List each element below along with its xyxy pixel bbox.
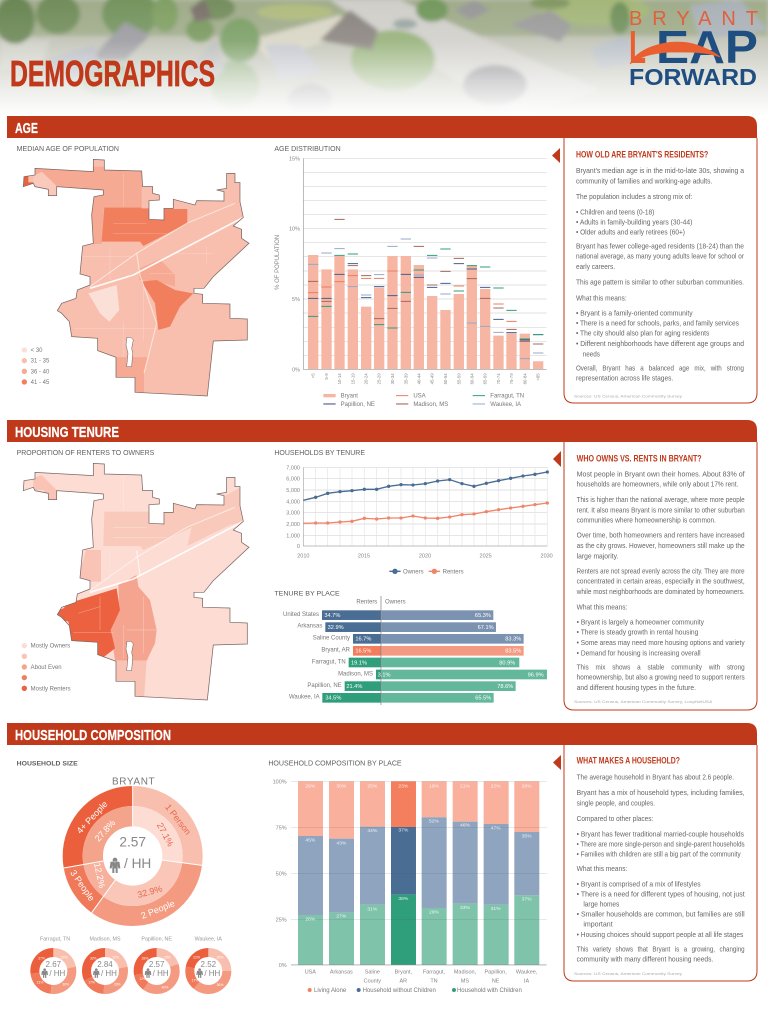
chart: age distribution: 80-84 — [522, 373, 527, 384]
chart: households by tenure: 3,000 — [286, 511, 300, 517]
panel: who owns vs. rents: and different housing types in the future. — [577, 683, 696, 692]
panel: median age map — [17, 146, 257, 400]
chart: household size donuts: 12.2% — [92, 862, 107, 889]
panel: what makes a household: single people, and couples. — [577, 798, 655, 807]
chart: household composition by place: 25% — [276, 917, 287, 923]
panel: median age map: 36 - 40 — [31, 369, 50, 375]
panel: who owns vs. rents: Over time, both homeowners and renters have increased — [577, 531, 745, 540]
chart: household size donuts: 22% — [61, 956, 67, 960]
panel: what makes a household: Bryant has a mix of household types, including families, — [577, 788, 745, 797]
chart: household composition by place: 38% — [398, 896, 409, 902]
panel: median age map: < 30 — [31, 348, 43, 354]
logo: Bryant Leap Forward: BRYANT — [629, 8, 758, 30]
panel: what makes a household: • Bryant has fewer traditional married-couple households — [577, 829, 744, 838]
panel: how old are Bryant's residents: • The city should also plan for aging residents — [576, 329, 710, 338]
chart: household composition by place: Waukee, — [516, 970, 538, 976]
panel: what makes a household: The average household in Bryant has about 2.6 people. — [577, 773, 734, 782]
panel: who owns vs. rents: communities where homeownership is common. — [577, 515, 716, 524]
chart: households by tenure: 2010 — [297, 553, 309, 559]
chart: households by tenure: Renters — [443, 569, 464, 575]
chart: age distribution: 30-34 — [390, 373, 395, 384]
chart: household size donuts — [17, 761, 227, 990]
chart: household composition by place: IA — [524, 978, 530, 984]
panel: what makes a household: • Smaller households are common, but families are still — [577, 910, 745, 919]
panel: who owns vs. rents — [553, 442, 757, 710]
chart: age distribution: 5-9 — [324, 373, 329, 380]
chart: tenure by place: 34.5% — [325, 696, 341, 702]
chart: household composition by place: 26% — [305, 917, 316, 923]
chart: tenure by place: 16.7% — [355, 637, 371, 643]
chart: households by tenure: 4,000 — [286, 499, 300, 505]
chart: household size donuts: HOUSEHOLD SIZE — [17, 761, 78, 768]
chart: households by tenure — [274, 450, 553, 575]
chart: household size donuts: 12% — [139, 977, 146, 981]
chart: tenure by place: 67.1% — [478, 625, 494, 631]
panel: who owns vs. rents: What this means: — [577, 603, 627, 612]
chart: household composition by place: 21% — [460, 783, 471, 789]
chart: age distribution: >85 — [536, 373, 541, 381]
panel: renters to owners map — [17, 450, 257, 704]
chart: tenure by place: 83.5% — [505, 649, 521, 655]
panel: how old are Bryant's residents: • Adults in family-building years (30-44) — [576, 217, 693, 226]
panel: how old are Bryant's residents: HOW OLD ARE BRYANT'S RESIDENTS? — [576, 149, 708, 159]
chart: age distribution: 40-44 — [416, 373, 421, 384]
chart: tenure by place: Waukee, IA — [289, 695, 320, 701]
chart: household composition by place: 43% — [336, 840, 347, 846]
chart: household composition by place: Madison, — [454, 970, 477, 976]
chart: age distribution: % OF POPULATION — [275, 235, 281, 290]
logo: Bryant Leap Forward: EAP — [656, 21, 758, 73]
chart: age distribution: 25-29 — [377, 373, 382, 384]
chart: household size donuts: 27.1% — [155, 821, 176, 848]
chart: age distribution: <5 — [311, 373, 316, 378]
section header: age: AGE — [15, 120, 38, 137]
chart: household size donuts: Madison, MS — [89, 936, 121, 942]
chart: households by tenure: 2020 — [419, 553, 431, 559]
chart: household composition by place: Household with Children — [457, 988, 522, 994]
chart: household composition by place: County — [364, 978, 381, 984]
chart: tenure by place: 3.1% — [378, 672, 391, 678]
chart: households by tenure: HOUSEHOLDS BY TENURE — [274, 450, 365, 457]
chart: household size donuts: 4+ People — [75, 799, 110, 836]
chart: tenure by place: 80.9% — [499, 660, 515, 666]
chart: households by tenure: 5,000 — [286, 488, 300, 494]
chart: tenure by place: 83.3% — [505, 637, 521, 643]
chart: household size donuts: 2.52 — [201, 960, 217, 969]
chart: household composition by place: 27% — [336, 914, 347, 920]
chart: household composition by place: 0% — [279, 963, 287, 969]
logo: Bryant Leap Forward — [629, 8, 758, 90]
panel: renters to owners map: Mostly Renters — [31, 686, 71, 692]
panel: how old are Bryant's residents: The population includes a strong mix of: — [576, 192, 692, 201]
chart: household size donuts: 27.8% — [93, 818, 117, 843]
chart: household size donuts: / HH — [101, 969, 117, 978]
panel: how old are Bryant's residents: • Different neighborhoods have different age groups and — [576, 339, 744, 348]
panel: who owns vs. rents: as the city grows. However, homeowners still make up the — [577, 541, 745, 550]
chart: tenure by place: Papillion, NE — [307, 683, 342, 689]
chart: household composition by place: AR — [400, 978, 407, 984]
chart: tenure by place: 19.1% — [351, 660, 367, 666]
panel: how old are Bryant's residents: Bryant's median age is in the mid-to-late 30s, showing a — [576, 166, 745, 175]
chart: age distribution: 65-69 — [483, 373, 488, 384]
chart: age distribution: 20-24 — [364, 373, 369, 384]
chart: tenure by place: Saline County — [313, 636, 350, 642]
panel: who owns vs. rents: WHO OWNS VS. RENTS IN BRYANT? — [577, 453, 702, 463]
panel: median age map: 41 - 45 — [31, 380, 50, 386]
panel: how old are Bryant's residents: community of families and working-age adults. — [576, 176, 712, 185]
panel: how old are Bryant's residents: This age pattern is similar to other suburban communities. — [576, 277, 744, 286]
panel: median age map: MEDIAN AGE OF POPULATION — [17, 146, 119, 153]
chart: household composition by place: 37% — [398, 828, 409, 834]
panel: who owns vs. rents: homeownership, but also a growing need to support renters — [577, 673, 745, 682]
chart: age distribution: 0% — [292, 368, 300, 374]
chart: tenure by place: 16.5% — [355, 649, 371, 655]
chart: household composition by place: TN — [430, 978, 438, 984]
chart: household composition by place: Papillion, — [485, 970, 507, 976]
chart: age distribution: Farragut, TN — [490, 394, 524, 400]
panel: how old are Bryant's residents: • There is a need for schools, parks, and family services — [576, 319, 739, 328]
chart: age distribution: 60-64 — [469, 373, 474, 384]
chart: household composition by place: 29% — [305, 783, 316, 789]
chart: household size donuts: 25% — [217, 956, 223, 960]
chart: age distribution: 15-19 — [350, 373, 355, 384]
chart: tenure by place: 65.5% — [475, 696, 491, 702]
panel: what makes a household: • Housing choices should support people at all life stages — [577, 930, 744, 939]
chart: age distribution: AGE DISTRIBUTION — [274, 146, 341, 153]
chart: household composition by place: 35% — [522, 833, 532, 839]
chart: households by tenure: 2030 — [541, 553, 553, 559]
panel: who owns vs. rents: rent. It also means Bryant is more similar to other suburban — [577, 505, 745, 514]
logo: Bryant Leap Forward: FORWARD — [629, 64, 757, 90]
title: DEMOGRAPHICS — [10, 53, 215, 94]
chart: age distribution: 45-49 — [430, 373, 435, 384]
chart: household size donuts: 32.9% — [136, 884, 163, 900]
chart: household composition by place: 75% — [276, 825, 287, 831]
panel: who owns vs. rents: Most people in Bryant own their homes. About 83% of — [577, 470, 746, 479]
section header: housing tenure: HOUSING TENURE — [15, 424, 119, 441]
chart: household size donuts: 17% — [192, 979, 198, 983]
chart: age distribution: Papillion, NE — [341, 402, 375, 408]
chart: household composition by place: NE — [492, 978, 500, 984]
chart: household size donuts: / HH — [124, 856, 151, 871]
chart: tenure by place: Owners — [385, 599, 406, 605]
panel: how old are Bryant's residents: Sources: US Census, American Community Survey — [574, 394, 682, 398]
chart: household composition by place: 100% — [273, 779, 287, 785]
panel: renters to owners map: About Even — [31, 665, 62, 671]
panel: how old are Bryant's residents: national average, as many young adults leave for school or — [576, 252, 744, 261]
chart: household size donuts: 1 Person — [163, 802, 193, 837]
panel: how old are Bryant's residents: early careers. — [576, 262, 615, 271]
chart: tenure by place: Farragut, TN — [312, 659, 346, 665]
chart: household size donuts: Waukee, IA — [195, 936, 222, 942]
panel: what makes a household: • Bryant is comprised of a mix of lifestyles — [577, 879, 701, 888]
panel: who owns vs. rents: • Bryant is largely a homeowner community — [577, 618, 704, 627]
chart: household composition by place: 31% — [491, 906, 501, 912]
panel: what makes a household: large homes — [583, 900, 620, 909]
chart: household composition by place: HOUSEHOLD COMPOSITION BY PLACE — [268, 761, 402, 768]
chart: households by tenure: Owners — [403, 569, 424, 575]
chart: tenure by place: 34.7% — [324, 613, 340, 619]
chart: household size donuts: 2.67 — [46, 960, 62, 969]
panel: what makes a household: What this means: — [577, 864, 627, 873]
chart: tenure by place — [274, 591, 547, 705]
chart: household size donuts: 40% — [162, 986, 168, 990]
chart: household size donuts: 22% — [193, 956, 200, 960]
chart: household composition by place: Living Alone — [314, 988, 347, 994]
chart: households by tenure: 2025 — [480, 553, 492, 559]
chart: households by tenure: 2015 — [358, 553, 370, 559]
chart: household size donuts: 32% — [90, 956, 97, 960]
chart: tenure by place: United States — [283, 612, 319, 618]
chart: tenure by place: 65.3% — [475, 613, 491, 619]
panel: what makes a household: important — [583, 920, 614, 929]
panel: what makes a household: Compared to other places: — [577, 814, 653, 823]
chart: household composition by place: 23% — [398, 783, 409, 789]
chart: age distribution: USA — [413, 394, 426, 400]
panel: how old are Bryant's residents — [552, 138, 757, 403]
panel: who owns vs. rents: households are homeowners, while only about 17% rent. — [577, 480, 738, 489]
chart: household size donuts: 17% — [88, 980, 95, 984]
chart: age distribution: 10-14 — [337, 373, 342, 384]
chart: household size donuts: 30% — [62, 982, 69, 986]
chart: tenure by place: Madison, MS — [338, 671, 373, 677]
chart: household size donuts: / HH — [204, 969, 221, 978]
panel: renters to owners map: Mostly Owners — [31, 644, 70, 650]
chart: household size donuts: 2.57 — [149, 960, 165, 969]
panel: who owns vs. rents: concentrated in certain areas, especially in the southwest, — [577, 577, 745, 586]
chart: households by tenure: 0 — [297, 544, 300, 550]
chart: age distribution — [274, 146, 547, 408]
chart: household size donuts: Farragut, TN — [40, 936, 70, 942]
panel: how old are Bryant's residents: What this means: — [576, 293, 627, 302]
chart: household size donuts: 29% — [114, 982, 121, 986]
panel: how old are Bryant's residents: needs — [583, 349, 600, 358]
panel: what makes a household: community with many different housing needs. — [577, 955, 713, 964]
panel: who owns vs. rents: • Some areas may need more housing options and variety — [577, 638, 745, 647]
panel: what makes a household: • Families with children are still a big part of the community — [577, 849, 741, 858]
panel: how old are Bryant's residents: representation across life stages. — [576, 374, 673, 383]
chart: tenure by place: Renters — [356, 599, 377, 605]
chart: age distribution: 10% — [289, 227, 300, 233]
section header: housing tenure — [7, 420, 757, 442]
section header: age — [7, 116, 757, 138]
panel: how old are Bryant's residents: Bryant has fewer college-aged residents (18-24) than the — [576, 241, 744, 250]
chart: household composition by place: 52% — [429, 818, 440, 824]
chart: household composition by place: 31% — [367, 906, 378, 912]
logo: Bryant Leap Forward: L — [629, 21, 646, 73]
chart: tenure by place: TENURE BY PLACE — [274, 591, 340, 598]
section header: household composition: HOUSEHOLD COMPOSITION — [15, 727, 171, 744]
chart: household composition by place — [268, 761, 547, 994]
chart: age distribution: 55-59 — [456, 373, 461, 384]
chart: households by tenure: 2,000 — [286, 522, 300, 528]
panel: who owns vs. rents: • There is steady growth in rental housing — [577, 628, 698, 637]
chart: household size donuts: 22% — [112, 956, 119, 960]
chart: age distribution: 15% — [289, 156, 300, 162]
chart: household size donuts: 20% — [164, 956, 171, 960]
panel: who owns vs. rents: Sources: US Census, American Community Survey, LoopNetUSA — [574, 700, 713, 704]
chart: household size donuts: BRYANT — [112, 777, 155, 788]
chart: household composition by place: 29% — [429, 909, 440, 915]
chart: household composition by place: 22% — [491, 783, 501, 789]
chart: household size donuts: / HH — [153, 969, 169, 978]
panel: how old are Bryant's residents: • Older adults and early retirees (60+) — [576, 228, 685, 237]
chart: household composition by place: Saline — [365, 970, 380, 976]
chart: household composition by place: 45% — [305, 838, 316, 844]
chart: household size donuts: Papillion, NE — [141, 936, 172, 942]
panel: how old are Bryant's residents: • Bryant is a family-oriented community — [576, 309, 693, 318]
chart: age distribution: 35-39 — [403, 373, 408, 384]
chart: age distribution: 50-54 — [443, 373, 448, 384]
chart: household composition by place: USA — [305, 970, 316, 976]
panel: who owns vs. rents: • Demand for housing is increasing overall — [577, 648, 701, 657]
chart: households by tenure: 7,000 — [286, 465, 300, 471]
panel: how old are Bryant's residents: • Children and teens (0-18) — [576, 207, 655, 216]
panel: what makes a household — [553, 745, 757, 981]
chart: age distribution: 5% — [292, 297, 300, 303]
chart: household composition by place: Arkansas — [330, 970, 353, 976]
chart: household size donuts: 2.84 — [97, 960, 113, 969]
chart: household composition by place: 28% — [522, 783, 532, 789]
chart: household size donuts: 2.57 — [119, 835, 146, 850]
chart: age distribution: Bryant — [341, 394, 358, 400]
chart: household composition by place: 47% — [491, 826, 501, 832]
chart: household composition by place: 46% — [460, 823, 471, 829]
chart: household composition by place: MS — [461, 978, 469, 984]
chart: age distribution: Waukee, IA — [490, 402, 521, 408]
panel: what makes a household: • There is a need for different types of housing, not just — [577, 890, 745, 899]
chart: tenure by place: Bryant, AR — [321, 648, 351, 654]
chart: household composition by place: 37% — [522, 897, 532, 903]
chart: tenure by place: Arkansas — [297, 624, 322, 630]
chart: tenure by place: 78.6% — [497, 684, 513, 690]
chart: tenure by place: 32.9% — [328, 625, 344, 631]
chart: household composition by place: 25% — [367, 783, 378, 789]
header photo background — [0, 0, 768, 116]
chart: household composition by place: 44% — [367, 828, 378, 834]
chart: household composition by place: Bryant, — [395, 970, 412, 976]
chart: household size donuts: 28% — [142, 956, 148, 960]
chart: household size donuts: / HH — [49, 969, 66, 978]
chart: households by tenure: 6,000 — [286, 477, 300, 483]
chart: household composition by place: 30% — [336, 783, 347, 789]
chart: tenure by place: 21.4% — [346, 684, 362, 690]
chart: tenure by place: 96.9% — [528, 672, 544, 678]
panel: median age map: 31 - 35 — [31, 359, 50, 365]
chart: age distribution: 70-74 — [496, 373, 501, 384]
chart: households by tenure: 1,000 — [286, 533, 300, 539]
chart: household size donuts: 21% — [37, 980, 43, 984]
chart: age distribution: 75-79 — [509, 373, 514, 384]
chart: household size donuts: 36% — [217, 983, 223, 987]
chart: household composition by place: Household without Children — [363, 988, 436, 994]
panel: what makes a household: Sources: US Census, American Community Survey — [574, 972, 682, 976]
panel: who owns vs. rents: large majority. — [577, 551, 618, 560]
chart: household size donuts: 3 People — [68, 868, 97, 903]
section header: household composition — [7, 723, 757, 745]
chart: household composition by place: 19% — [429, 783, 440, 789]
chart: household size donuts: 2 People — [140, 898, 176, 921]
chart: household size donuts: 27% — [38, 956, 45, 960]
chart: household composition by place: 33% — [460, 905, 471, 911]
chart: household composition by place: 50% — [276, 871, 287, 877]
chart: age distribution: Madison, MS — [413, 402, 448, 408]
panel: renters to owners map: PROPORTION OF RENTERS TO OWNERS — [17, 450, 155, 457]
panel: who owns vs. rents: while most neighborhoods are dominated by homeowners. — [576, 587, 745, 596]
chart: household composition by place: Farragut, — [423, 970, 446, 976]
panel: what makes a household: WHAT MAKES A HOUSEHOLD? — [577, 756, 680, 766]
